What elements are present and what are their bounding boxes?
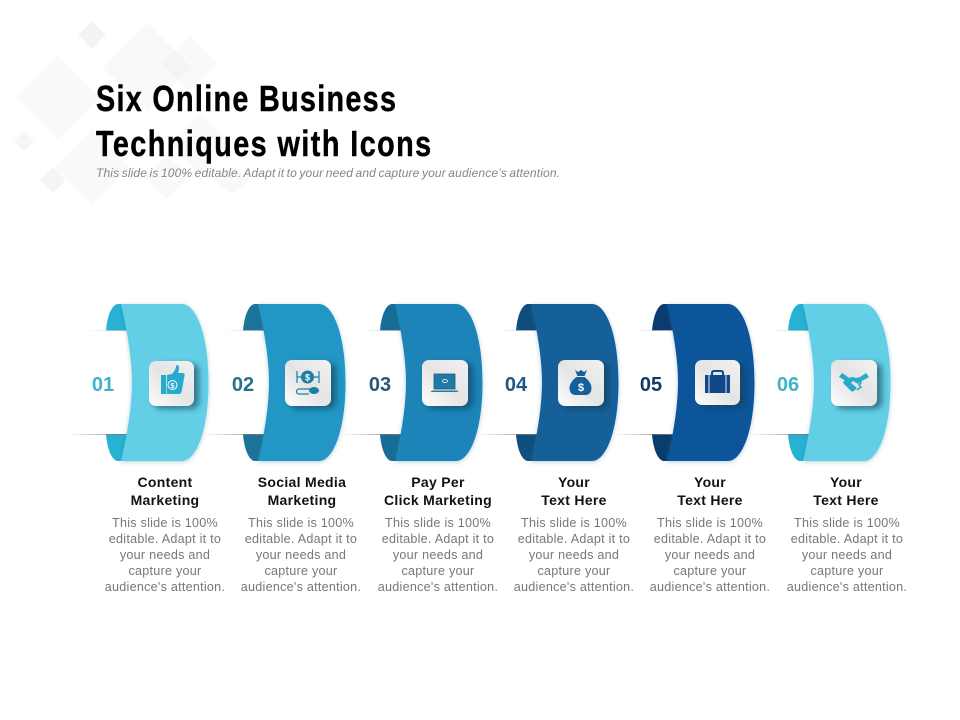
text block 4: capture your — [537, 564, 611, 578]
band 03 — [340, 304, 482, 461]
band 01 — [66, 304, 208, 461]
text block 3 — [378, 474, 498, 594]
text block 6: Your — [830, 474, 862, 490]
text block 5: editable. Adapt it to — [654, 532, 766, 546]
text block 1: Content — [138, 474, 193, 490]
icon box: thumbs up — [149, 361, 194, 406]
text block 2 — [241, 474, 361, 594]
icon box: money bag: $ — [578, 382, 584, 394]
text block 5: capture your — [673, 564, 747, 578]
text block 2: editable. Adapt it to — [245, 532, 357, 546]
title — [96, 78, 431, 164]
text block 6: Text Here — [813, 492, 879, 508]
text block 5: This slide is 100% — [657, 516, 763, 530]
number 03: 03 — [369, 374, 391, 396]
text block 3: This slide is 100% — [385, 516, 491, 530]
number 06: 06 — [777, 374, 799, 396]
text block 3: capture your — [401, 564, 475, 578]
number 05: 05 — [640, 374, 662, 396]
text block 4: Text Here — [541, 492, 607, 508]
text block 3: your needs and — [393, 548, 483, 562]
text block 6: This slide is 100% — [794, 516, 900, 530]
text block 1: Marketing — [131, 492, 199, 508]
subtitle: This slide is 100% editable. Adapt it to your need and capture your audience’s attention. — [96, 166, 560, 180]
text block 4: editable. Adapt it to — [518, 532, 630, 546]
text block 2: capture your — [264, 564, 338, 578]
band 04 — [476, 304, 618, 461]
number 02: 02 — [232, 374, 254, 396]
band 05 — [612, 304, 754, 461]
text block 6: audience's attention. — [787, 580, 907, 594]
text block 1: editable. Adapt it to — [109, 532, 221, 546]
text block 3: editable. Adapt it to — [382, 532, 494, 546]
icon box: thumbs up: $ — [171, 383, 175, 390]
text block 5: your needs and — [665, 548, 755, 562]
text block 1: audience's attention. — [105, 580, 225, 594]
text block 3: audience's attention. — [378, 580, 498, 594]
icon box: handshake — [831, 360, 877, 406]
text block 5: audience's attention. — [650, 580, 770, 594]
icon box: pay per click network — [285, 360, 331, 406]
band 06 — [748, 304, 890, 461]
band 02 — [203, 304, 346, 461]
text block 5 — [650, 474, 770, 594]
text block 1 — [105, 474, 225, 594]
text block 2: audience's attention. — [241, 580, 361, 594]
text block 4: audience's attention. — [514, 580, 634, 594]
text block 3: Pay Per — [411, 474, 465, 490]
text block 6 — [787, 474, 907, 594]
text block 3: Click Marketing — [384, 492, 492, 508]
text block 5: Your — [694, 474, 726, 490]
text block 4: Your — [558, 474, 590, 490]
text block 4: your needs and — [529, 548, 619, 562]
text block 6: your needs and — [802, 548, 892, 562]
icon box: laptop — [422, 360, 468, 406]
text block 2: your needs and — [256, 548, 346, 562]
text block 2: This slide is 100% — [248, 516, 354, 530]
title: Six Online Business — [96, 78, 396, 119]
text block 1: capture your — [128, 564, 202, 578]
icon box: pay per click network: $ — [305, 372, 310, 382]
text block 2: Social Media — [258, 474, 346, 490]
text block 1: This slide is 100% — [112, 516, 218, 530]
background diamonds — [14, 21, 250, 205]
icon box: briefcase — [695, 360, 740, 405]
text block 4: This slide is 100% — [521, 516, 627, 530]
number 04: 04 — [505, 374, 528, 396]
text block 6: editable. Adapt it to — [791, 532, 903, 546]
text block 6: capture your — [810, 564, 884, 578]
text block 2: Marketing — [268, 492, 336, 508]
text block 4 — [514, 474, 634, 594]
text block 1: your needs and — [120, 548, 210, 562]
text block 5: Text Here — [677, 492, 743, 508]
icon box: money bag — [558, 360, 604, 406]
title: Techniques with Icons — [96, 123, 431, 164]
number 01: 01 — [92, 374, 114, 396]
